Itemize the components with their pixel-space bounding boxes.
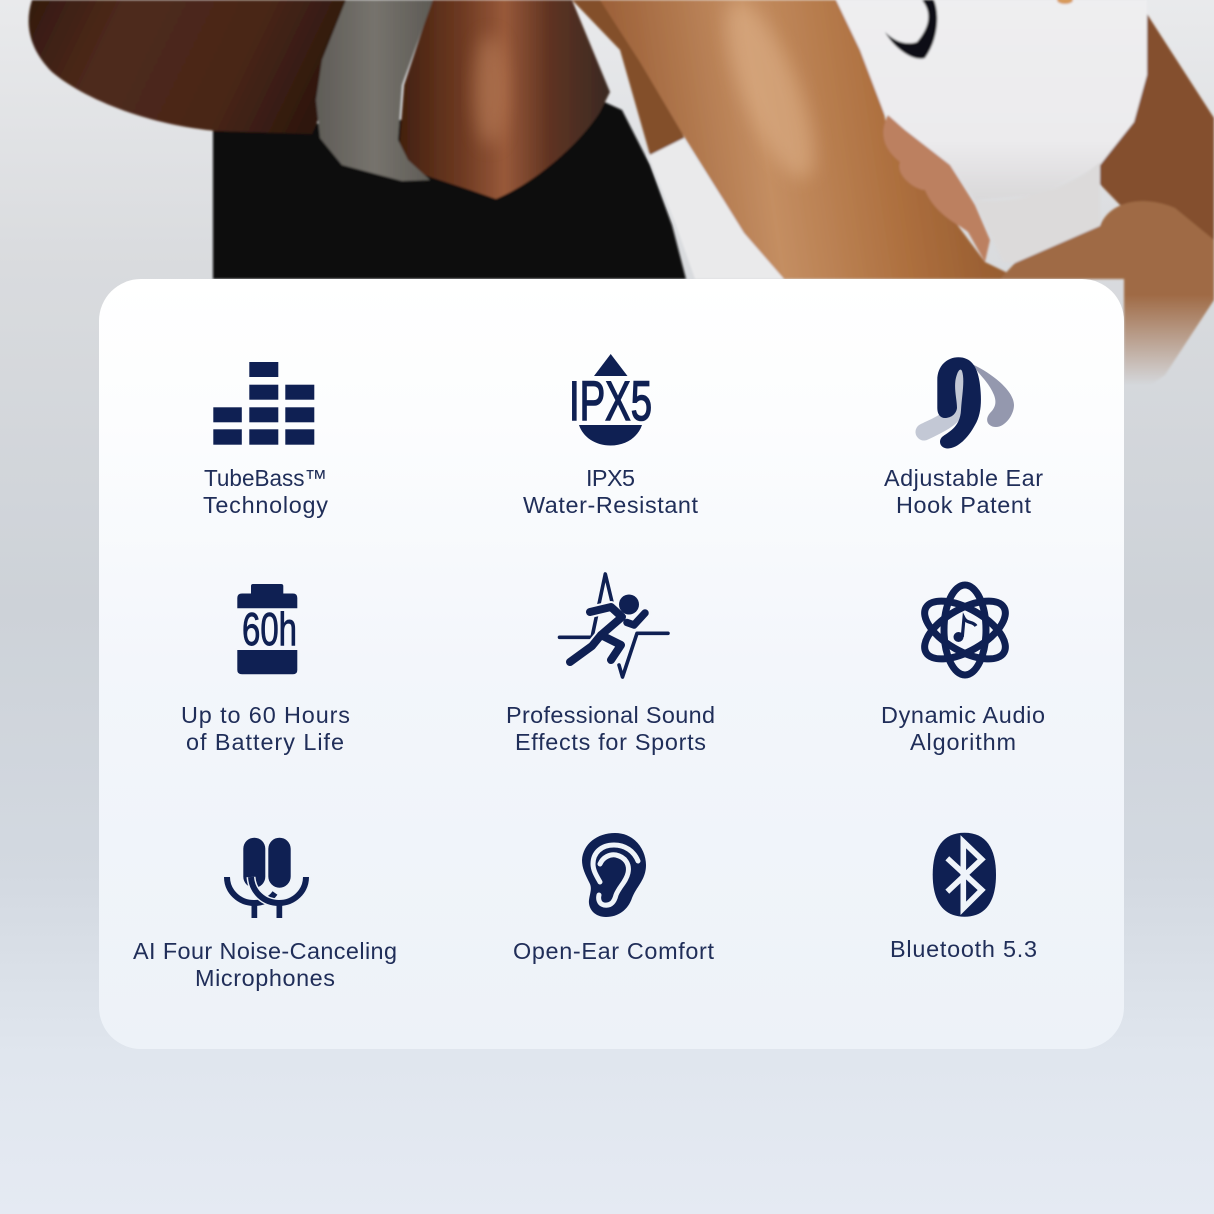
label: Technology [203,492,328,518]
feature: Adjustable Ear Hook [884,357,1043,518]
label [133,938,397,991]
feature: Open-Ear Comfort [513,833,714,964]
woman's hand on the right [1000,201,1214,400]
label: AI Four Noise-Canceling [133,938,397,964]
white feature card [99,279,1124,1049]
label [203,465,328,518]
label: Open-Ear Comfort [513,938,714,964]
woman's arm [600,0,1020,279]
icon: runner over pulse line [560,574,668,677]
label: Up to 60 Hours [181,702,350,728]
icon: twin microphones [227,838,306,918]
feature: IPX5 [523,354,698,518]
grey wristband [316,0,433,181]
feature: Bluetooth [890,833,1037,962]
label: Water-Resistant [523,492,698,518]
label: Bluetooth 5.3 [890,936,1037,962]
man's forearm [29,0,352,134]
label: Effects for Sports [515,729,706,755]
icon: water drop with IPX5 [569,354,652,446]
woman's right arm [1098,14,1214,241]
label: Adjustable Ear [884,465,1043,491]
label [181,702,350,755]
label: Microphones [195,965,335,991]
white top lower band [974,162,1100,263]
woman's white top, main [836,0,1147,200]
icon: battery with 60h [237,584,297,674]
hair strands [885,0,937,59]
feature: TubeBass Technology [203,362,328,518]
icon: atom with music note [916,585,1014,675]
man's black tank top [213,100,686,279]
label: Dynamic Audio [881,702,1045,728]
woman's white top, left side [648,137,784,279]
label: Hook Patent [896,492,1032,518]
label [506,702,715,755]
feature: Sports sound effects [506,574,715,755]
fingers [883,115,990,262]
label [884,465,1043,518]
icon: battery with 60h: 60h [242,603,297,655]
orange detail at top [1057,0,1073,4]
label [881,702,1045,755]
icon: equalizer bars [213,362,314,445]
label: of Battery Life [186,729,344,755]
feature: Dynamic Audio [881,585,1045,755]
icon: bluetooth badge [933,833,996,917]
skin highlight on elbow [474,35,506,145]
label: Professional Sound [506,702,715,728]
feature: Battery [181,584,350,755]
man's upper arm and elbow [399,0,610,199]
photo: two athletes with crossed arms [29,0,1214,400]
skin highlight on woman's arm [722,2,819,180]
feature: Microphones [133,838,397,991]
icon: ear hook [924,357,1014,448]
label: IPX5 [586,465,635,491]
label: TubeBass™ [204,465,327,491]
label: Algorithm [910,729,1016,755]
icon: ear [582,833,646,917]
label [523,465,698,518]
woman's torso shadow [572,0,684,155]
icon: water drop with IPX5: IPX5 [569,369,652,432]
